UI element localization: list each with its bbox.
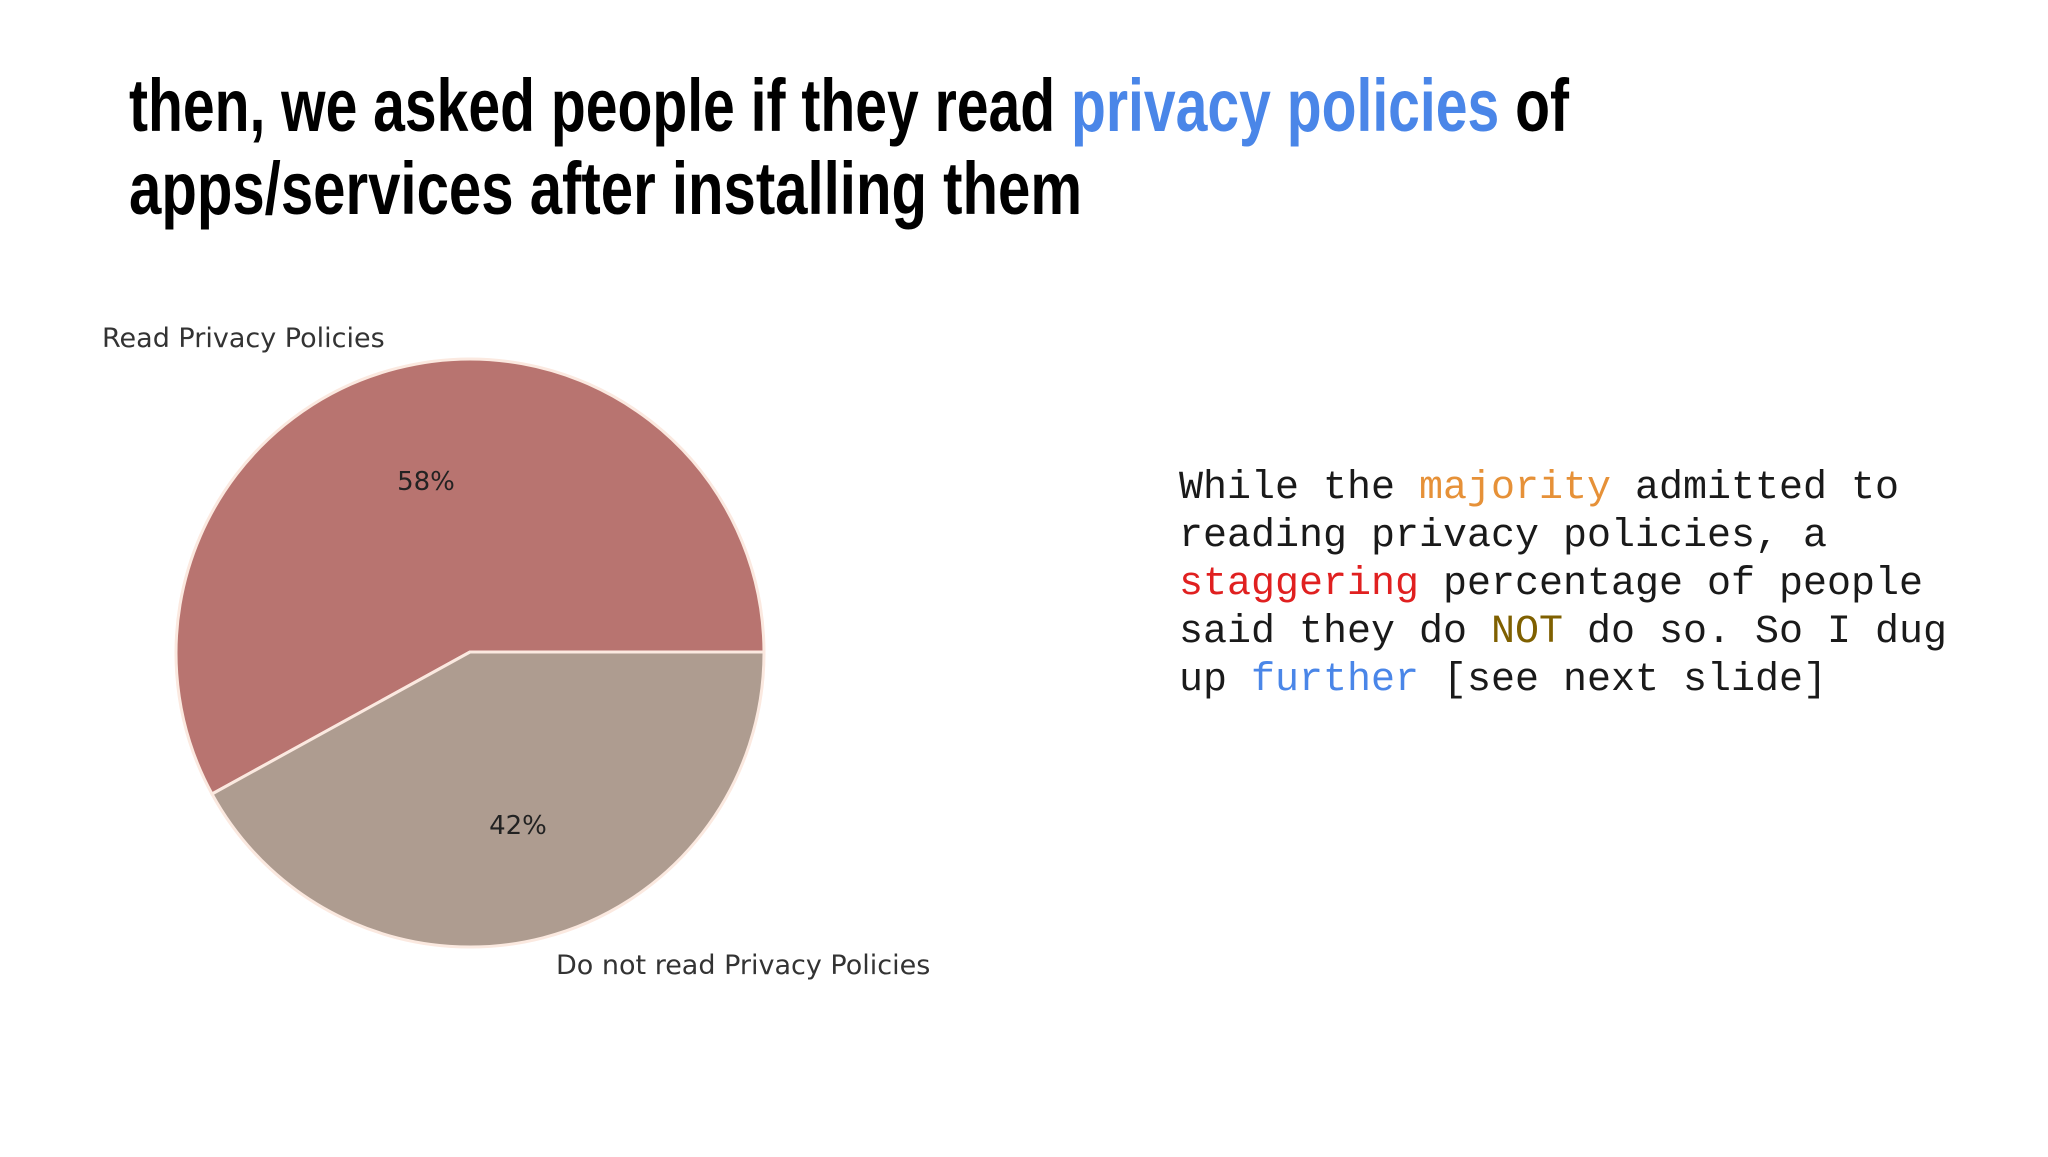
text block: commentary: said they do NOT do so. So I dug <box>1179 610 1947 655</box>
label: 42%: 42% <box>489 811 547 841</box>
label: read privacy policies: Read Privacy Policies <box>102 323 385 354</box>
title: then, we asked people if they read privacy policies of <box>129 64 1569 147</box>
text block: commentary: up further [see next slide] <box>1179 658 1827 703</box>
text block: commentary: reading privacy policies, a <box>1179 514 1827 559</box>
slice: read privacy policies 58% <box>176 359 764 794</box>
slice: do not read 42% <box>212 652 764 947</box>
title: apps/services after installing them <box>129 147 1082 230</box>
label: do not read: Do not read Privacy Policies <box>556 950 930 981</box>
text block: commentary: While the majority admitted to <box>1179 466 1899 511</box>
label: 58%: 58% <box>397 467 455 497</box>
pie chart <box>102 323 930 981</box>
text block: commentary <box>1179 466 1947 703</box>
title <box>129 64 1569 230</box>
text block: commentary: staggering percentage of people <box>1179 562 1923 607</box>
